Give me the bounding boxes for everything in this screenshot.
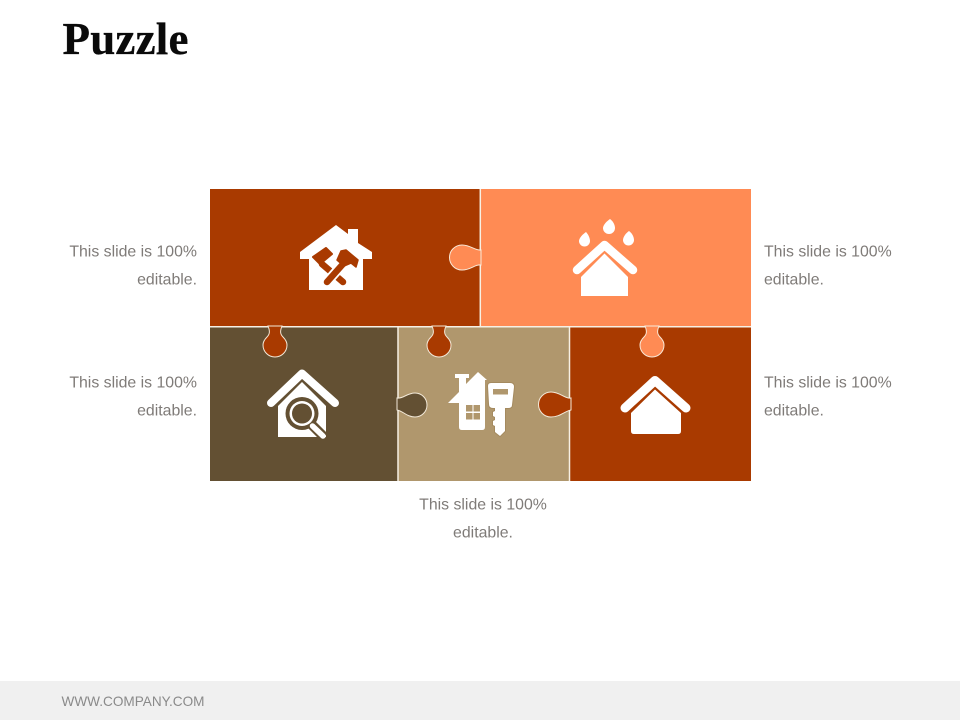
panel: tan puzzle piece with house and key [398, 327, 570, 481]
puzzle tab: orange bottom [640, 326, 664, 357]
caption: middle left: This slide is 100% [69, 374, 197, 392]
dividers [210, 189, 751, 481]
puzzle tab: dark brown [397, 393, 427, 417]
caption: top right: This slide is 100% [764, 244, 892, 260]
title: Puzzle [62, 14, 189, 64]
icon: house with rain drops [577, 219, 634, 296]
panel: orange puzzle piece with rain house [450, 189, 751, 357]
puzzle tab: orange left [450, 245, 481, 270]
puzzle tab: rust [538, 392, 571, 417]
icon: house with tools [300, 225, 372, 290]
caption: middle right: editable. [764, 402, 824, 420]
panel: rust puzzle piece with tools house [210, 189, 480, 357]
puzzle tab: rust right [427, 326, 451, 357]
caption: middle left: editable. [137, 402, 197, 420]
caption: top right: editable. [764, 272, 824, 288]
panel: dark brown puzzle piece with magnifier house [210, 327, 427, 481]
caption: top left: This slide is 100% [69, 244, 197, 260]
panel: rust puzzle piece with plain house [538, 327, 751, 481]
icon: house with magnifier [271, 374, 335, 437]
footer [0, 681, 960, 720]
caption: top left: editable. [137, 272, 197, 288]
icon: house and key [448, 372, 514, 436]
icon: house [625, 380, 686, 434]
puzzle tab: rust left [263, 326, 287, 357]
footer: WWW.COMPANY.COM [62, 694, 204, 709]
caption: bottom center: editable. [453, 524, 513, 542]
caption: middle right: This slide is 100% [764, 374, 892, 392]
caption: bottom center: This slide is 100% [419, 496, 547, 514]
